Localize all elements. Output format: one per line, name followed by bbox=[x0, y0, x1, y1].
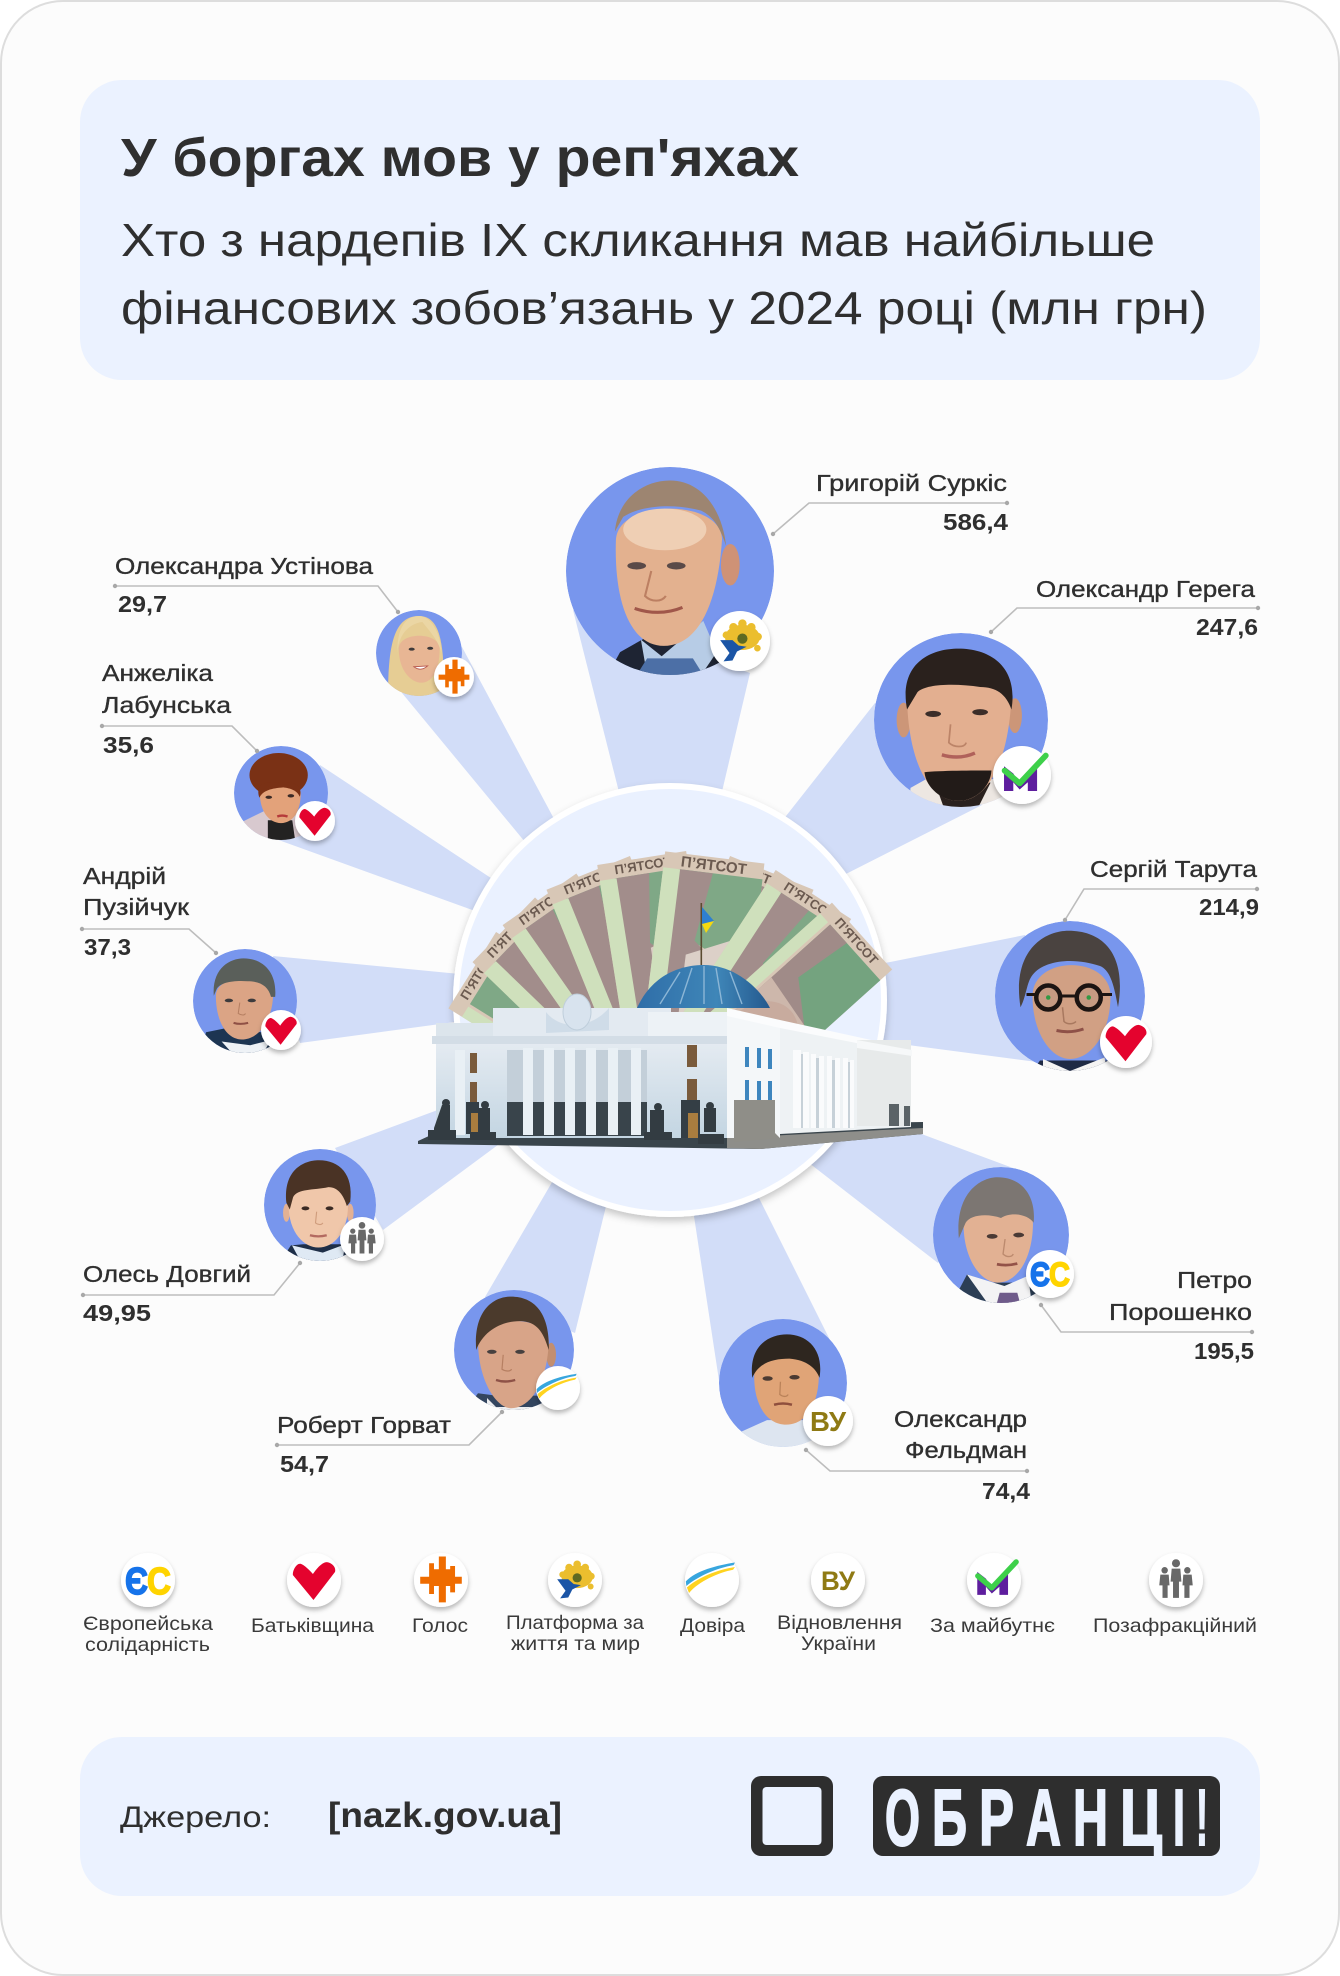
panel: header bbox=[80, 80, 1260, 380]
logo wordmark: А bbox=[1026, 1773, 1061, 1862]
flag bbox=[700, 903, 714, 965]
legend item: Відновлення України: України bbox=[801, 1633, 876, 1655]
name: Петро bbox=[1177, 1267, 1252, 1293]
portrait bbox=[719, 1319, 847, 1447]
leader line bbox=[113, 584, 400, 614]
legend item: Голос bbox=[412, 1553, 468, 1637]
party badge bbox=[710, 611, 770, 671]
beams from portraits to centre bbox=[273, 610, 1037, 1387]
name: Фельдман bbox=[905, 1437, 1027, 1463]
banknote fan: П’ЯТСОТ bbox=[613, 854, 672, 877]
logo wordmark: Б bbox=[932, 1773, 967, 1862]
leader line bbox=[275, 1410, 504, 1447]
party badge: Є bbox=[1030, 1256, 1050, 1294]
legend item: Платформа за життя та мир: життя та мир bbox=[511, 1633, 640, 1655]
name: Олександр bbox=[894, 1406, 1027, 1432]
banknote fan: П’ЯТСОТ bbox=[484, 909, 535, 961]
banknote fan bbox=[448, 851, 892, 1136]
person: Олесь Довгий bbox=[81, 1149, 384, 1326]
party badge bbox=[340, 1217, 384, 1261]
legend item: Відновлення України: Відновлення bbox=[777, 1612, 902, 1634]
person: Григорій Суркіс bbox=[566, 467, 1009, 675]
title: У боргах мов у реп'яхах bbox=[121, 128, 799, 188]
side colonnade bbox=[793, 1050, 854, 1128]
portrait bbox=[264, 1149, 376, 1261]
person: Олександр Герега bbox=[874, 576, 1260, 807]
name bbox=[102, 660, 231, 718]
leader line bbox=[989, 606, 1260, 634]
porch bbox=[734, 1100, 780, 1142]
name: Лабунська bbox=[102, 692, 231, 718]
party badge bbox=[1026, 1250, 1074, 1298]
value: 247,6 bbox=[1196, 614, 1258, 640]
party badge bbox=[803, 1396, 853, 1446]
subtitle bbox=[121, 214, 1207, 334]
banknote fan: П’ЯТСОТ bbox=[457, 946, 500, 1002]
legend item: Голос: Голос bbox=[412, 1615, 468, 1637]
banknote fan: П’ЯТСОТ bbox=[516, 883, 572, 928]
person: Сергій Тарута bbox=[995, 856, 1259, 1071]
banknote fan: П’ЯТСОТ bbox=[781, 879, 838, 923]
name: Пузійчук bbox=[83, 894, 190, 920]
legend item: Платформа за життя та мир: Платформа за bbox=[506, 1612, 644, 1634]
leader line bbox=[804, 1448, 1029, 1473]
legend item: Європейська солідарність: С bbox=[147, 1561, 171, 1603]
subtitle: фінансових зобов’язань у 2024 році (млн грн) bbox=[121, 282, 1207, 334]
value: 586,4 bbox=[943, 509, 1008, 535]
legend item: За майбутнє: За майбутнє bbox=[930, 1615, 1055, 1637]
name: Григорій Суркіс bbox=[816, 470, 1007, 496]
legend item: Відновлення України: ВУ bbox=[821, 1566, 856, 1596]
portrait bbox=[933, 1167, 1069, 1303]
name bbox=[894, 1406, 1027, 1463]
logo wordmark: Н bbox=[1073, 1773, 1108, 1862]
party badge bbox=[536, 1366, 580, 1410]
portrait bbox=[234, 746, 328, 840]
legend item: Платформа за життя та мир bbox=[506, 1553, 644, 1655]
leader line bbox=[1039, 1303, 1254, 1334]
party badge bbox=[434, 657, 474, 697]
legend item: Європейська солідарність bbox=[83, 1553, 213, 1656]
portrait bbox=[376, 610, 462, 696]
legend item: Батьківщина: Батьківщина bbox=[251, 1615, 374, 1637]
source label: Джерело: bbox=[120, 1801, 271, 1834]
person: Олександр Фельдман bbox=[719, 1319, 1030, 1504]
central circle with banknotes and parliament building bbox=[418, 783, 923, 1217]
name: Роберт Горват bbox=[277, 1412, 452, 1438]
legend item: Європейська солідарність: Є bbox=[125, 1561, 148, 1603]
portrait bbox=[874, 633, 1048, 807]
party badge bbox=[295, 801, 335, 841]
logo square bbox=[751, 1776, 833, 1856]
legend bbox=[83, 1553, 1257, 1656]
value: 29,7 bbox=[118, 591, 167, 617]
portrait bbox=[193, 949, 297, 1053]
name: Андрій bbox=[83, 863, 166, 889]
party badge bbox=[1100, 1016, 1152, 1068]
leader line bbox=[771, 501, 1009, 536]
person: Петро Порошенко bbox=[933, 1167, 1254, 1364]
value: 195,5 bbox=[1194, 1338, 1254, 1364]
party badge: ВУ bbox=[810, 1406, 847, 1437]
right wing bbox=[727, 1010, 780, 1138]
legend item: Європейська солідарність: солідарність bbox=[85, 1634, 210, 1656]
name: Порошенко bbox=[1109, 1299, 1252, 1325]
value: 49,95 bbox=[83, 1300, 151, 1326]
value: 37,3 bbox=[84, 934, 131, 960]
banknote fan: П’ЯТСОТ bbox=[562, 862, 620, 897]
legend item: Батьківщина bbox=[251, 1553, 374, 1637]
logo wordmark: Р bbox=[979, 1773, 1014, 1862]
name: Анжеліка bbox=[102, 660, 213, 686]
leader line bbox=[1063, 887, 1259, 922]
legend item: Позафракційний bbox=[1093, 1553, 1257, 1637]
panel: footer bbox=[80, 1737, 1260, 1896]
subtitle: Хто з нардепів IX скликання мав найбільше bbox=[121, 214, 1155, 266]
emblem bbox=[546, 994, 609, 1033]
logo wordmark bbox=[873, 1773, 1220, 1862]
legend item: Довіра bbox=[680, 1553, 745, 1637]
banknote fan: П’ЯТСОТ bbox=[832, 915, 881, 967]
source link text: [nazk.gov.ua] bbox=[328, 1796, 562, 1835]
name bbox=[83, 863, 190, 920]
portrait bbox=[566, 467, 774, 675]
value: 214,9 bbox=[1199, 894, 1259, 920]
legend item: Довіра: Довіра bbox=[680, 1615, 745, 1637]
leader line bbox=[80, 927, 218, 955]
value: 54,7 bbox=[280, 1451, 329, 1477]
portrait bbox=[454, 1290, 574, 1410]
leader line bbox=[100, 724, 259, 753]
main facade bbox=[436, 1038, 727, 1138]
person: Анжеліка Лабунська bbox=[100, 660, 335, 841]
leader line bbox=[81, 1261, 302, 1297]
logo wordmark: І bbox=[1173, 1773, 1185, 1862]
value: 74,4 bbox=[982, 1478, 1030, 1504]
person: Андрій Пузійчук bbox=[80, 863, 301, 1053]
portrait bbox=[995, 921, 1145, 1071]
party badge: С bbox=[1049, 1256, 1070, 1294]
logo wordmark: Ц bbox=[1120, 1773, 1162, 1862]
columns bbox=[455, 1048, 641, 1135]
parliament building bbox=[418, 903, 923, 1149]
name bbox=[1109, 1267, 1252, 1325]
person: Роберт Горват bbox=[275, 1290, 580, 1477]
value: 35,6 bbox=[103, 732, 154, 758]
name: Олесь Довгий bbox=[83, 1261, 251, 1287]
logo wordmark: ! bbox=[1196, 1773, 1208, 1862]
dome bbox=[637, 965, 770, 1008]
banknote fan: П’ЯТСОТ bbox=[680, 853, 748, 878]
banknote fan: П’ЯТСОТ bbox=[740, 862, 798, 898]
person: Олександра Устінова bbox=[113, 553, 474, 697]
name: Сергій Тарута bbox=[1090, 856, 1257, 882]
legend item: За майбутнє bbox=[930, 1553, 1055, 1637]
party badge bbox=[261, 1010, 301, 1050]
party badge bbox=[993, 746, 1051, 804]
name: Олександра Устінова bbox=[115, 553, 373, 579]
statues bbox=[428, 1099, 724, 1144]
legend item: Європейська солідарність: Європейська bbox=[83, 1613, 213, 1635]
legend item: Позафракційний: Позафракційний bbox=[1093, 1615, 1257, 1637]
name: Олександр Герега bbox=[1036, 576, 1255, 602]
logo wordmark: О bbox=[885, 1773, 920, 1862]
legend item: Відновлення України bbox=[777, 1553, 902, 1655]
